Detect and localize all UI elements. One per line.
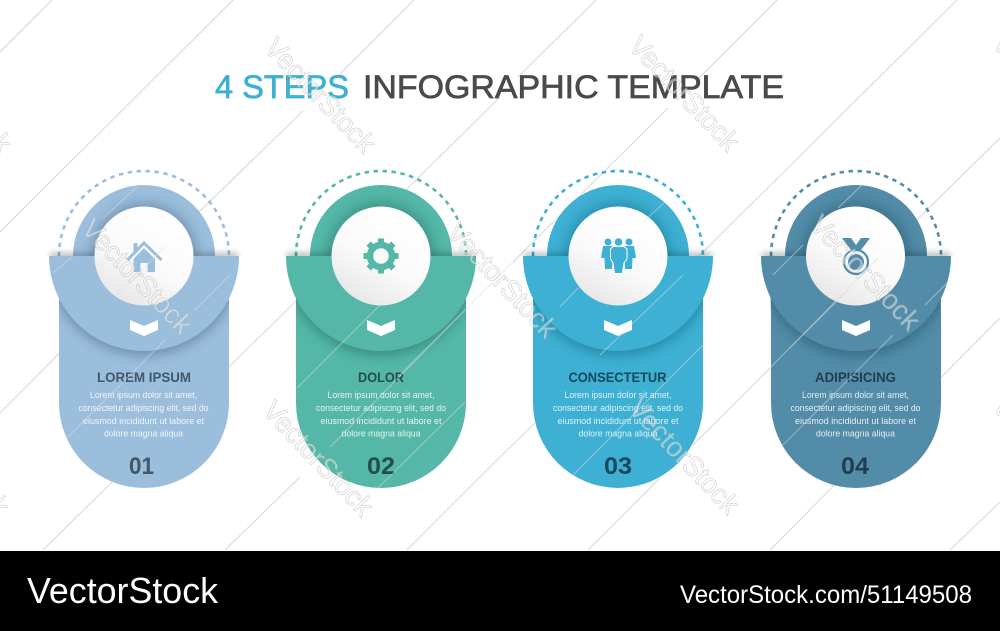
heading 1: LOREM IPSUM: [97, 370, 191, 385]
fold shadow 3: [524, 253, 712, 261]
white disc 4: [806, 206, 905, 306]
dashed arc 3: [533, 171, 703, 256]
chevron 2: [367, 320, 395, 336]
heading 3: CONSECTETUR: [568, 370, 667, 385]
title: [215, 69, 784, 105]
footer bar: [0, 551, 1000, 631]
fold shadow 2: [287, 253, 475, 261]
card 2: dolor: [286, 171, 476, 488]
arch 4: [785, 185, 927, 256]
watermark text: [0, 28, 1000, 523]
description 4: dolore magna aliqua: [816, 428, 896, 438]
arch 2: [310, 185, 452, 256]
arch shadow 3: [561, 198, 675, 256]
footer brand: VectorStock: [27, 570, 219, 611]
number 1: 01: [129, 453, 154, 480]
fan 4: [761, 256, 951, 351]
description 1: dolore magna aliqua: [104, 428, 184, 438]
chevron 4: [842, 320, 870, 336]
dashed arc 1: [59, 171, 229, 256]
footer url: VectorStock.com/51149508: [680, 581, 972, 609]
fan shadow 4: [770, 296, 940, 360]
watermark text: VectorStock: [257, 395, 380, 523]
description 3: [553, 390, 683, 438]
card 3: consectetur: [523, 171, 713, 488]
title accent: 4 STEPS: [215, 69, 349, 105]
description 3: Lorem ipsum dolor sit amet,: [564, 390, 672, 400]
fan 3: [523, 256, 713, 351]
description 2: dolore magna aliqua: [342, 428, 421, 438]
card 1: lorem ipsum: [49, 171, 239, 488]
watermark text: VectorStock: [76, 213, 199, 341]
card 4: adipisicing: [761, 171, 951, 488]
description 3: dolore magna aliqua: [578, 428, 658, 438]
body 4: [771, 256, 941, 488]
fold shadow 1: [50, 253, 238, 261]
description 1: eiusmod incididunt ut labore et: [83, 416, 204, 426]
body 1: [59, 256, 229, 488]
watermark text: VectorStock: [804, 209, 927, 337]
chevron 1: [130, 320, 158, 336]
watermark text: VectorStock: [623, 393, 746, 521]
heading 2: DOLOR: [358, 370, 404, 385]
icon: gear: [364, 238, 398, 274]
fan shadow 2: [296, 298, 466, 360]
description 1: consectetur adipiscing elit, sed do: [78, 403, 208, 413]
fan 1: [49, 256, 239, 351]
description 4: consectetur adipiscing elit, sed do: [790, 403, 920, 413]
description 4: eiusmod incididunt ut labore et: [795, 416, 916, 426]
icon: people: [601, 238, 636, 274]
chevron 3: [604, 320, 632, 336]
body 2: [296, 256, 466, 488]
arch 1: [73, 185, 215, 256]
white disc 3: [568, 206, 668, 306]
arch shadow 4: [800, 199, 912, 256]
arch 3: [547, 185, 689, 256]
description 3: eiusmod incididunt ut labore et: [558, 416, 679, 426]
dashed arc 2: [296, 171, 466, 256]
watermark text: VectorStock: [441, 217, 564, 345]
icon: medal: [842, 238, 870, 274]
watermark text: VectorStock: [623, 30, 746, 158]
description 4: [790, 390, 920, 438]
watermark text: VectorStock: [259, 32, 382, 160]
description 4: Lorem ipsum dolor sit amet,: [802, 390, 909, 400]
body 3: [533, 256, 703, 488]
icon: house: [128, 243, 162, 272]
fan 2: [286, 256, 476, 351]
description 1: Lorem ipsum dolor sit amet,: [90, 390, 197, 400]
fan shadow 3: [533, 298, 703, 360]
arch shadow 1: [86, 198, 202, 256]
number 3: 03: [604, 453, 632, 480]
number 4: 04: [841, 453, 870, 480]
fan shadow 1: [59, 298, 229, 361]
description 2: [316, 390, 446, 438]
description 2: consectetur adipiscing elit, sed do: [316, 403, 446, 413]
white disc 1: [94, 206, 194, 306]
title main: INFOGRAPHIC TEMPLATE: [363, 69, 784, 105]
number 2: 02: [367, 453, 395, 480]
watermark lines over cards: [53, 185, 947, 488]
description 1: [78, 390, 208, 438]
dashed arc 4: [771, 171, 941, 256]
arch shadow 2: [324, 199, 438, 256]
white disc 2: [332, 206, 430, 306]
heading 4: ADIPISICING: [815, 370, 896, 385]
fold shadow 4: [762, 253, 950, 261]
description 3: consectetur adipiscing elit, sed do: [553, 403, 683, 413]
description 2: eiusmod incididunt ut labore et: [320, 416, 442, 426]
description 2: Lorem ipsum dolor sit amet,: [328, 390, 434, 400]
